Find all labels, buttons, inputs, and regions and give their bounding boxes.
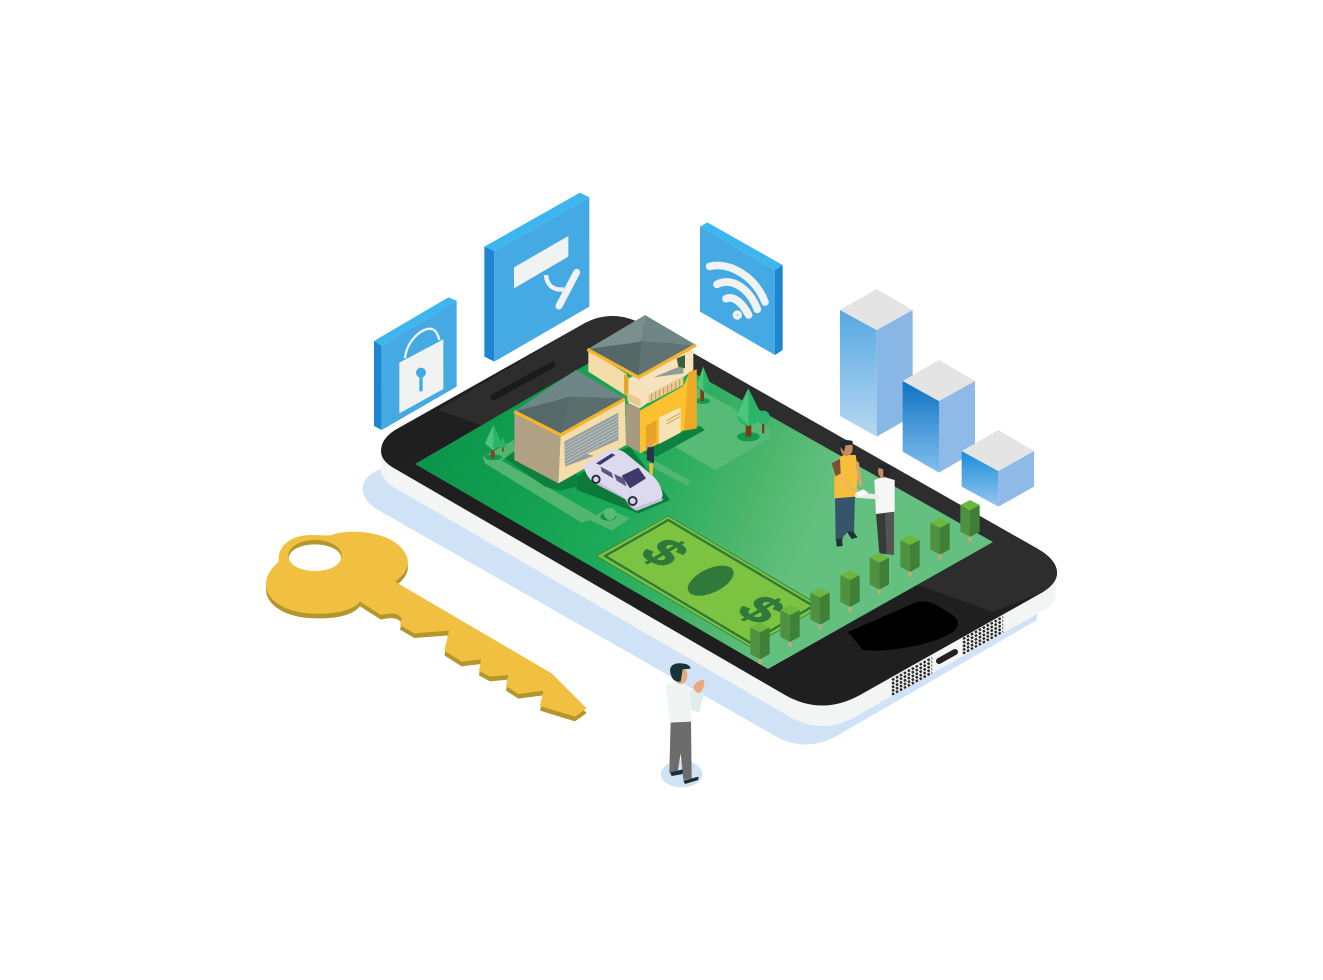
phone: earpiece [494, 365, 552, 397]
person: man in yellow shirt [832, 440, 861, 547]
phone: shadow [363, 400, 1038, 745]
lock glyph [399, 329, 443, 413]
garden shrub [600, 508, 616, 521]
money: dollar sign left: $ [627, 531, 703, 574]
security camera glyph [514, 236, 577, 306]
money: centre oval [683, 559, 738, 602]
house [485, 315, 770, 511]
lock tile [374, 297, 457, 430]
person: man in white shirt [856, 464, 895, 555]
bar chart: three isometric blocks [840, 289, 1034, 507]
car [583, 449, 663, 511]
screen: lawn, paths and ground shadows [483, 387, 770, 531]
garage block [514, 370, 626, 483]
wifi tile [700, 222, 783, 355]
money: dollar sign right: $ [724, 588, 799, 631]
key [266, 532, 587, 721]
people and hedges on the screen [750, 440, 980, 664]
phone: black front [381, 316, 1057, 706]
hedge: row of eight bushes [750, 500, 980, 664]
phone: lighter reflection [438, 316, 1057, 612]
person: standing man in white shirt [661, 663, 704, 787]
phone: right speaker grille [963, 617, 1003, 654]
phone: left speaker grille [892, 658, 932, 694]
camera tile [484, 193, 589, 362]
money: dollar bill on the screen [597, 516, 822, 647]
bar: medium [903, 360, 975, 473]
phone: screen [415, 338, 993, 669]
wifi glyph [710, 265, 765, 317]
main house block [587, 315, 697, 453]
phone: white body [381, 450, 1057, 726]
person: woman beside car [647, 443, 654, 475]
tree: left of garage [485, 425, 507, 460]
bar: tall [840, 289, 913, 437]
key: hole [288, 540, 342, 571]
phone: home button [848, 601, 958, 651]
tree: on lawn [737, 388, 770, 441]
tree: behind house [695, 367, 711, 404]
phone: charging port [939, 652, 955, 661]
bar: short [962, 430, 1034, 507]
